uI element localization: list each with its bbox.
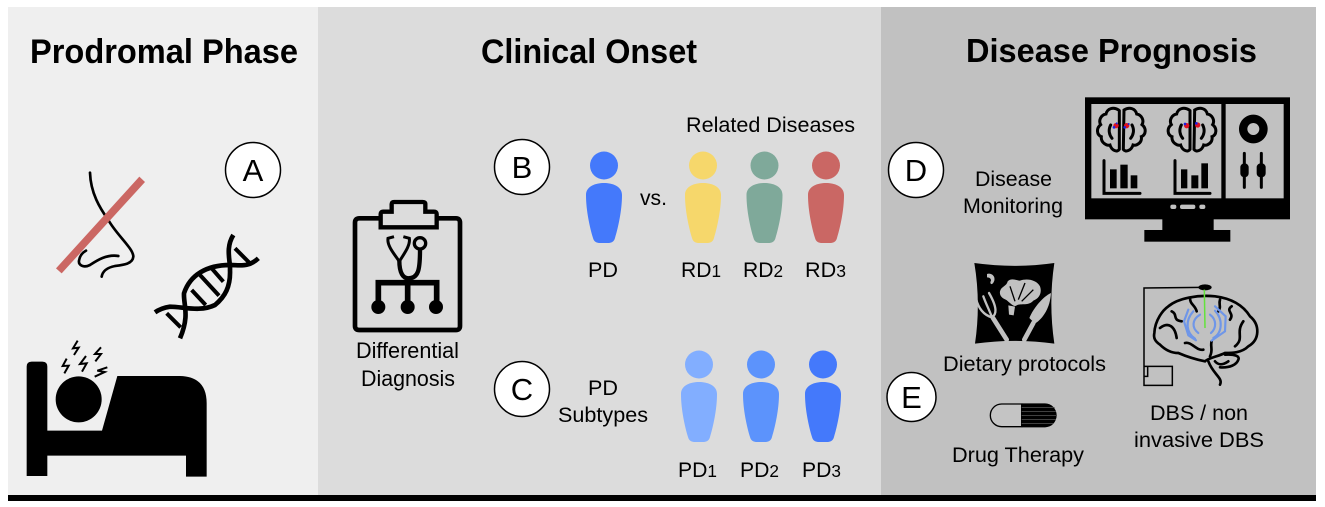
label: RD3: RD3 [805,258,846,282]
label: related diseases: Related Diseases [686,113,855,137]
badge B [494,140,550,194]
icon: dietary plate with broccoli, fork and knife [974,263,1054,344]
badge A [226,142,280,198]
badge E: E [901,380,922,415]
label: DBS / non invasive DBS [1134,401,1264,452]
person: RD1 [685,152,721,243]
label: disease monitoring [963,167,1063,218]
heading: disease prognosis: Disease Prognosis [966,33,1257,70]
person: RD2 [746,152,782,243]
panel: prodromal phase [8,7,318,495]
label: differential diagnosis: Differential [356,338,459,363]
badge A: A [243,153,264,188]
icon: monitor with brains and charts [1085,97,1290,242]
label: disease monitoring: Disease [975,167,1052,191]
label: drug therapy: Drug Therapy [952,443,1084,467]
icon: DBS brain with electrode [1144,284,1257,385]
label: PD subtypes [558,376,648,427]
label: disease monitoring: Monitoring [963,194,1063,218]
badge B: B [512,150,532,185]
person: PD [586,152,622,243]
bottom rule [8,495,1316,501]
label: RD2: RD2 [743,258,783,282]
person: PD3 [805,350,841,442]
label: PD1: PD1 [678,458,717,482]
badge D [888,142,944,198]
icon: crossed-out nose [56,173,145,277]
label: PD3: PD3 [802,458,841,482]
badge C [494,362,550,416]
icon: sleeper in bed with lightning bolts [27,341,207,477]
heading: prodromal phase: Prodromal Phase [30,33,298,71]
icon: DNA helix [155,235,258,338]
label: PD subtypes: Subtypes [558,403,648,427]
label: vs.: vs. [640,186,667,210]
label: dietary protocols: Dietary protocols [943,352,1106,376]
badge C: C [511,372,533,407]
label: PD: PD [588,258,618,282]
person: PD1 [681,350,717,442]
icon: drug capsule [990,403,1057,427]
person: PD2 [743,350,779,442]
badge D: D [905,153,927,188]
heading: clinical onset: Clinical Onset [481,33,697,71]
label: PD2: PD2 [740,458,779,482]
label: DBS / non invasive DBS: invasive DBS [1134,428,1264,452]
badge E [887,372,936,422]
icon: clipboard with stethoscope [355,202,460,330]
person: RD3 [808,152,844,243]
label: RD1: RD1 [681,258,721,282]
label: differential diagnosis: Diagnosis [361,366,455,391]
label: differential diagnosis [356,338,459,391]
label: DBS / non invasive DBS: DBS / non [1150,401,1248,425]
label: PD subtypes: PD [588,376,618,400]
